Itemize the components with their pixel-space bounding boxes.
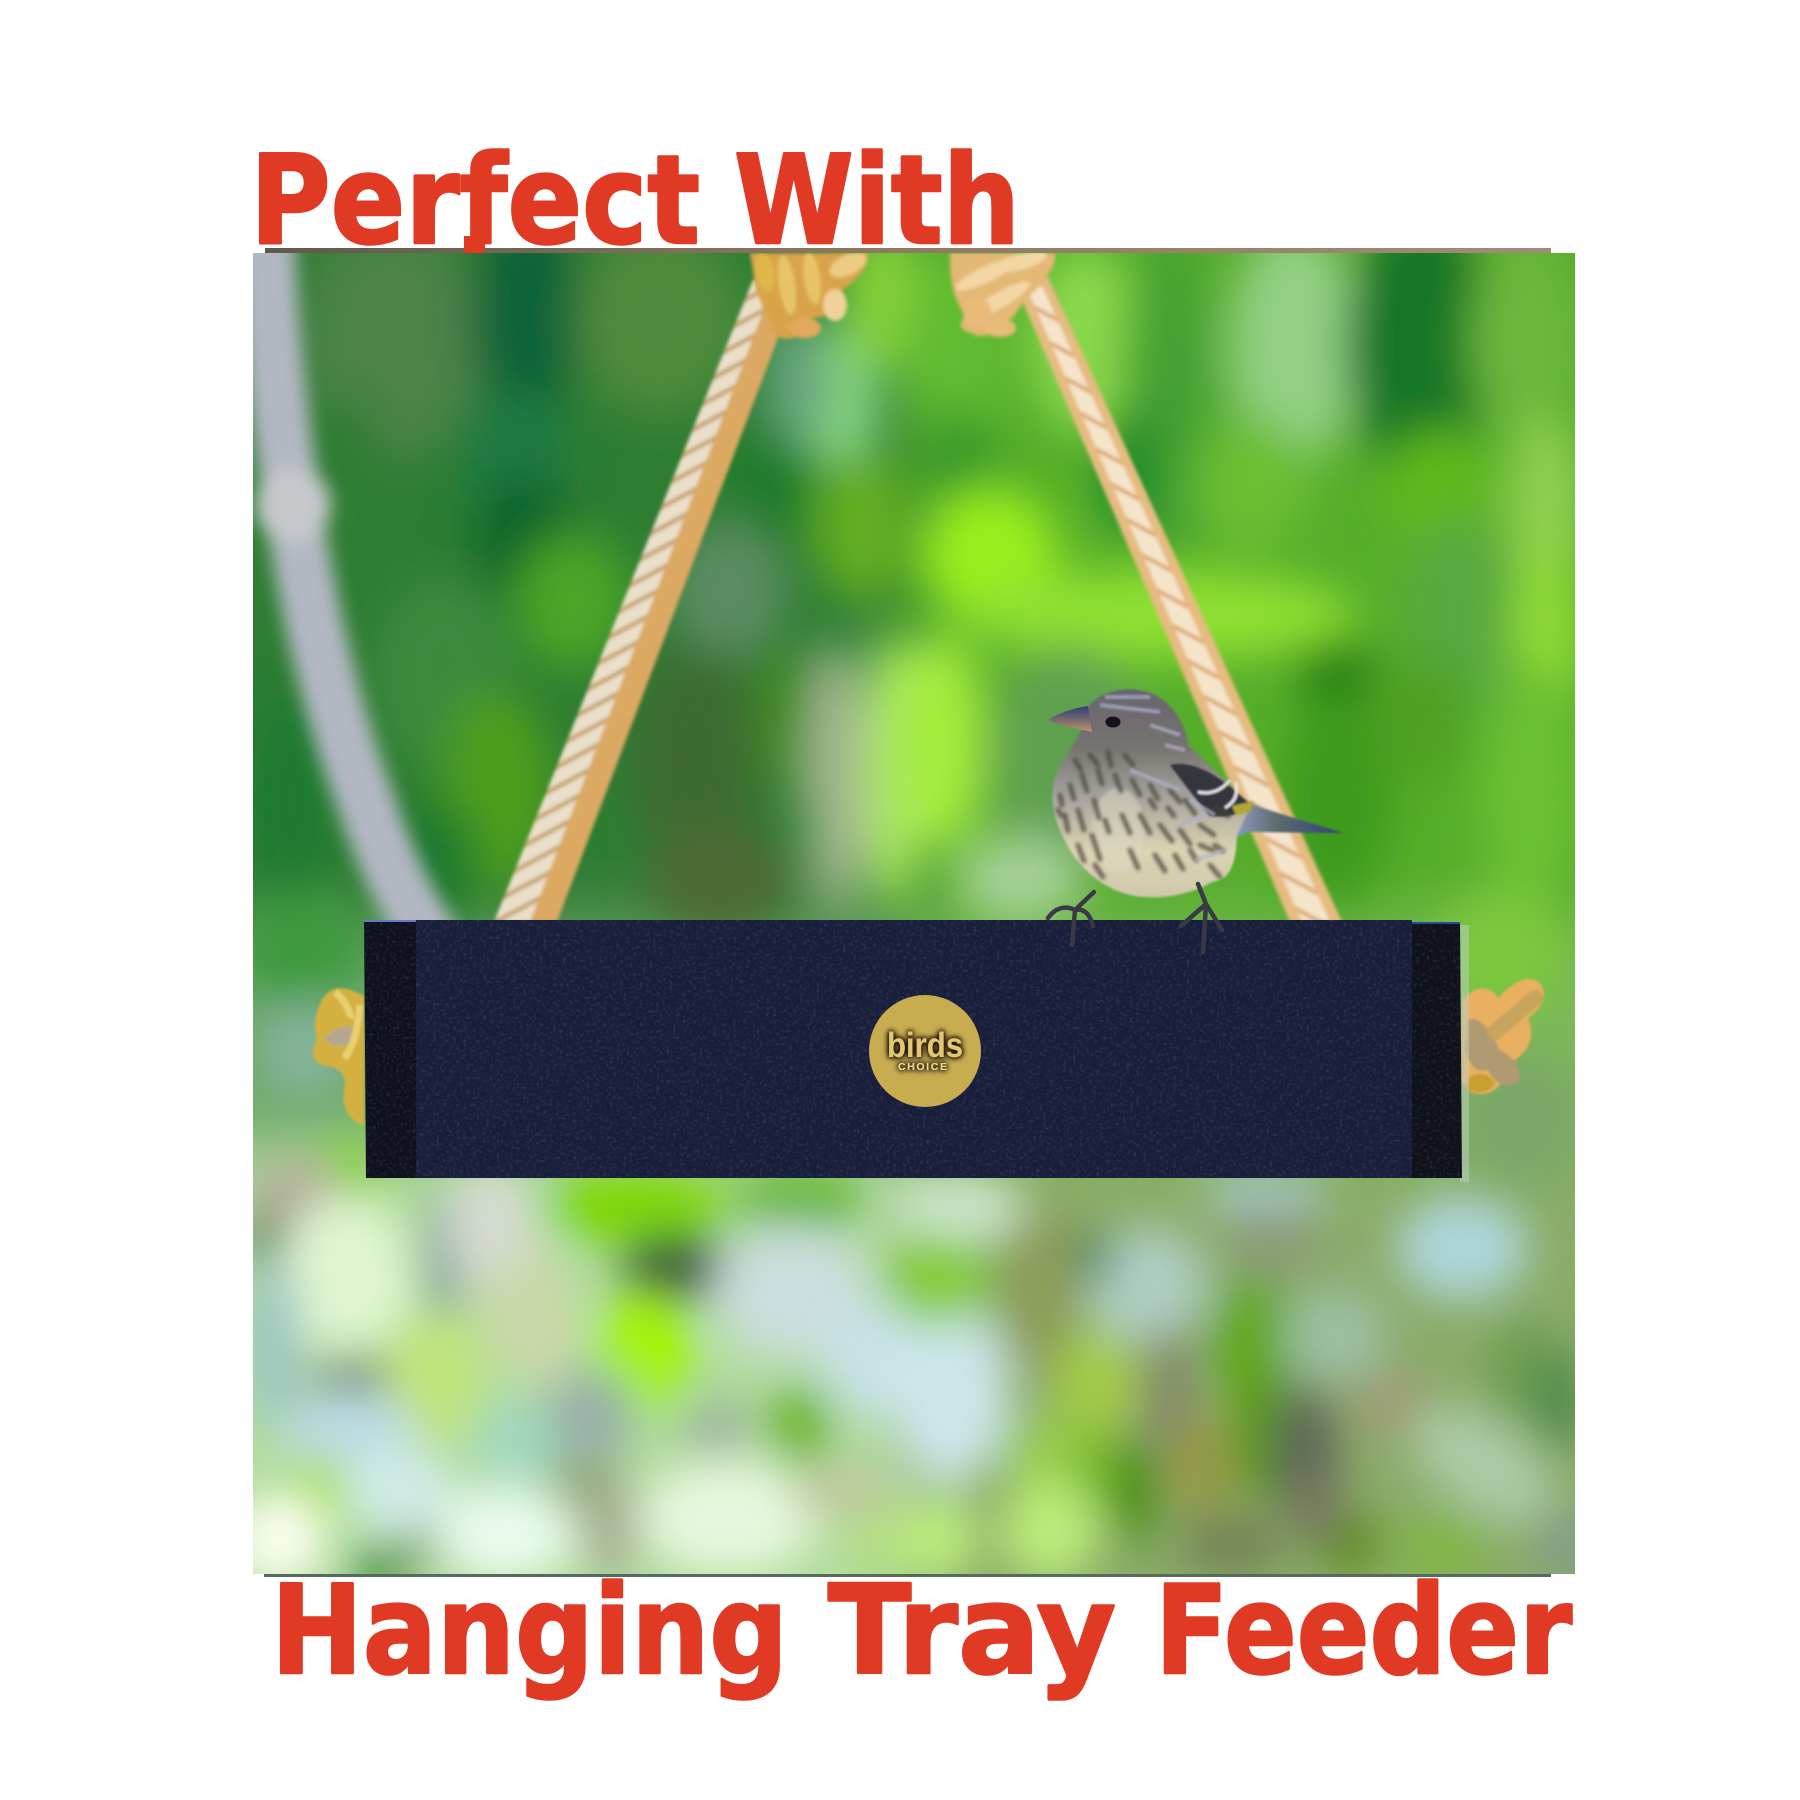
tray: left end panel — [364, 921, 416, 1178]
rope knot: top left — [750, 247, 870, 339]
rope knot: top right — [950, 247, 1055, 337]
rope: left — [494, 280, 800, 922]
background: out-of-focus grey branch — [255, 240, 430, 940]
background: upper foliage blobs — [240, 210, 1590, 1195]
bird pale breast patch — [1092, 788, 1144, 872]
bird head streaks — [1100, 697, 1225, 860]
title: Hanging Tray Feeder: Tray — [828, 1560, 1116, 1703]
tray: end panel highlights — [364, 920, 416, 922]
tray: pale edge sliver — [1460, 925, 1469, 1182]
logo badge: birds choice — [869, 995, 981, 1107]
bird tail — [1235, 796, 1343, 838]
bird breast streaks — [1058, 752, 1228, 877]
tray: felt grain — [364, 920, 1462, 1178]
title: Perfect With — [250, 130, 1020, 273]
panel: feeder photograph — [253, 253, 1575, 1574]
rope knot: right side of tray — [1462, 979, 1544, 1094]
bird legs and feet — [1048, 884, 1222, 952]
title: Hanging Tray Feeder: Hanging — [271, 1560, 788, 1703]
icon: finch perched on tray — [1048, 689, 1343, 952]
background: blurred foliage base — [253, 253, 1575, 1574]
badge disc — [869, 995, 981, 1107]
tray feeder — [364, 920, 1469, 1182]
badge wordmark: birds — [887, 1026, 963, 1065]
title: Hanging Tray Feeder — [271, 1560, 1572, 1703]
divider: rule above photo — [265, 248, 1551, 253]
bird beak — [1048, 706, 1092, 732]
background: lower foliage blobs — [230, 1153, 1586, 1592]
rope: right — [1012, 277, 1342, 922]
title: Hanging Tray Feeder: Feeder — [1155, 1560, 1572, 1703]
divider: rule below photo — [264, 1574, 1551, 1577]
rope knot: left side of tray — [313, 988, 364, 1125]
title: Perfect With: Perfect — [250, 130, 700, 273]
tray: front face — [416, 920, 1412, 1178]
tray: right end panel — [1412, 922, 1462, 1178]
bird eye — [1106, 716, 1120, 728]
bird body — [1052, 689, 1248, 897]
badge subtext: CHOICE — [898, 1061, 947, 1073]
title: Perfect With: With — [734, 130, 1020, 273]
bird wing — [1170, 764, 1254, 817]
